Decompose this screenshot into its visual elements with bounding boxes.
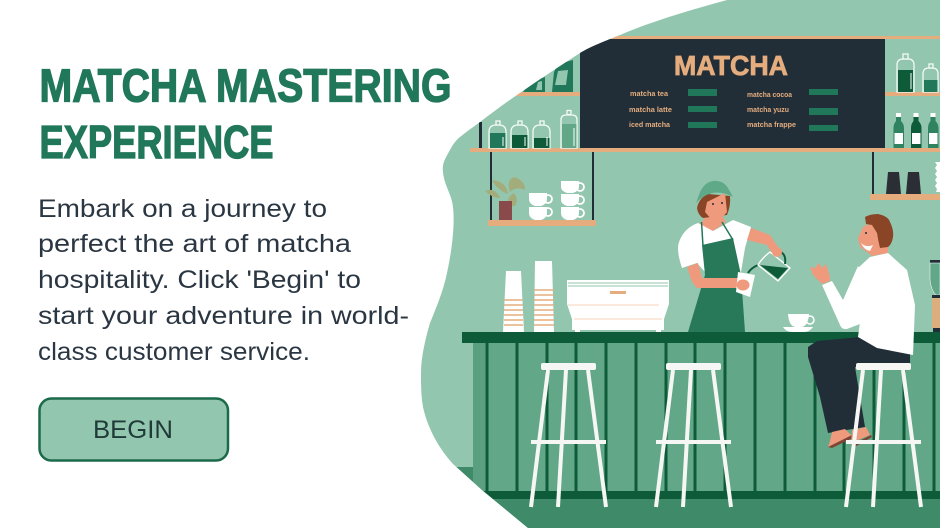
white cups stacks [529,181,584,220]
menu board: iced matcha [629,120,671,129]
hair [865,214,893,248]
head [858,222,888,256]
title [40,60,452,168]
title: MATCHA MASTERING [40,60,452,112]
plant [485,177,525,220]
trousers [808,337,910,433]
counter [456,332,940,528]
hand [810,263,830,284]
begin button: BEGIN [93,416,173,444]
cup in hand [736,272,755,297]
bottles [894,113,938,148]
neck and chest [700,217,726,231]
cup on counter [783,314,814,332]
shoes [828,429,852,447]
espresso machine [567,280,669,332]
stool 2 [656,363,731,507]
cafe illustration [400,0,940,528]
barista [678,181,790,332]
jars left [489,110,577,148]
paper cup stacks [503,261,554,332]
stool 3 [846,363,921,507]
menu board: matcha yuzu [747,105,789,114]
menu board: matcha latte [629,105,672,114]
menu board: matcha cocoa [747,90,793,99]
intro text [38,195,409,366]
barista right arm [747,228,778,253]
menu board [580,39,885,148]
title: EXPERIENCE [40,116,274,168]
intro text: Embark on a journey to [38,195,327,223]
pitcher [748,251,790,281]
intro text: perfect the art of matcha [38,230,351,258]
customer arm [822,266,860,330]
shirt [858,253,915,355]
jars right [897,54,938,92]
intro text: hospitality. Click 'Begin' to [38,266,361,294]
menu board: matcha frappe [747,120,796,129]
begin button [40,398,228,460]
tea packages [523,60,573,92]
stool 1 [531,363,606,507]
apron [688,238,745,332]
top shelf strip [600,36,940,39]
intro text: start your adventure in world- [38,302,409,330]
barista left arm [687,263,738,288]
bar stools [531,363,921,507]
customer [808,214,915,448]
hat [696,181,733,203]
blender [930,260,940,332]
intro text: class customer service. [38,338,310,366]
menu board: MATCHA [674,50,788,81]
barista shirt [678,220,751,272]
dark cups and plates [886,162,940,194]
shelves [470,92,940,226]
menu board: matcha tea [630,89,669,98]
head [697,194,730,218]
